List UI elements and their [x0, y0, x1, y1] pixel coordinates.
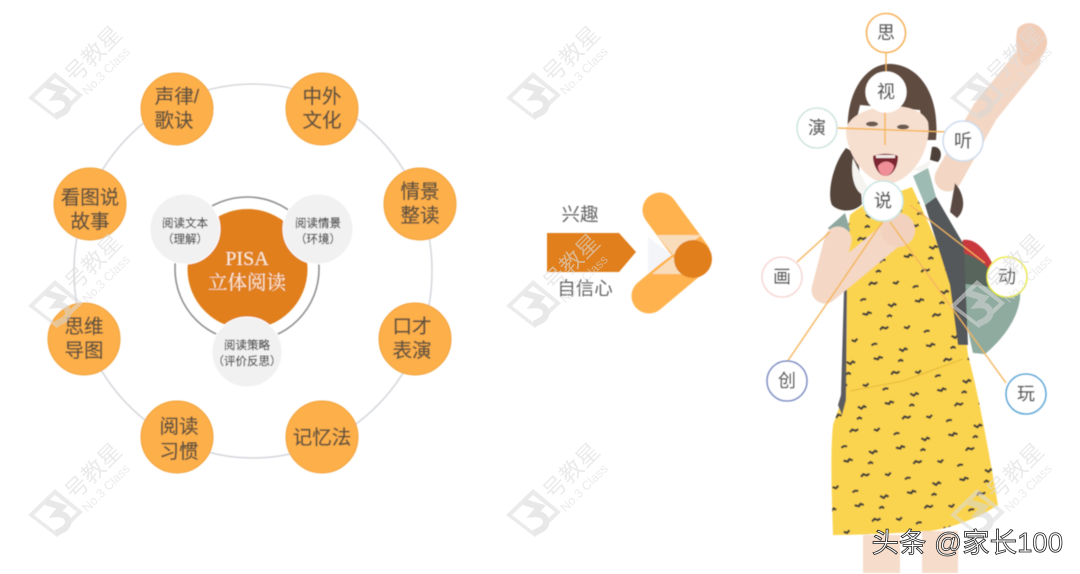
- bubble: 玩: [1006, 374, 1046, 414]
- node: 思维导图: 导图: [64, 340, 104, 362]
- watermark: bottom left: No.3 Class: [80, 462, 133, 515]
- watermark: middle right: No.3 Class: [1002, 253, 1055, 306]
- node: 阅读习惯: 阅读: [159, 416, 199, 438]
- bubble: 思: [866, 14, 906, 52]
- watermark: middle left: 号教星: [60, 229, 127, 296]
- watermark: middle right: 号教星: [982, 229, 1049, 296]
- bubble: 视: [866, 72, 906, 112]
- node: 阅读习惯: [141, 401, 213, 473]
- node: 看图说故事: 故事: [70, 211, 110, 233]
- collar and neck: [852, 158, 932, 198]
- bubble: 听: 听: [954, 131, 972, 151]
- bubble: 说: [863, 181, 903, 221]
- inner node: reading text: 阅读文本: [162, 216, 208, 230]
- centre circle: PISA: PISA: [225, 248, 269, 270]
- node: 口才表演: 表演: [392, 340, 432, 362]
- node: 声律/歌诀: 声律/: [155, 86, 200, 108]
- arrow: pentagon: [547, 233, 636, 272]
- node: 看图说故事: [54, 168, 126, 240]
- watermark: bottom middle: No.3 Class: [558, 462, 611, 515]
- bubble: 画: [762, 257, 802, 297]
- node: 中外文化: [286, 73, 358, 145]
- watermark: middle left: [28, 229, 133, 328]
- node: 记忆法: 记忆法: [293, 427, 351, 449]
- watermark: top left: [28, 21, 133, 120]
- face: [846, 106, 929, 184]
- inner node: reading strategy: （评价反思）: [212, 355, 282, 368]
- node: 中外文化: 文化: [302, 110, 342, 132]
- watermark: top right: [950, 21, 1055, 120]
- bubble: 视: 视: [877, 82, 895, 102]
- label: confidence: 自信心: [557, 278, 613, 299]
- eyes and mouth: [866, 122, 909, 176]
- raised arm: [948, 23, 1047, 178]
- watermark: top left: No.3 Class: [80, 45, 133, 98]
- node: 看图说故事: 看图说: [61, 187, 119, 209]
- watermark: bottom middle: [506, 438, 611, 537]
- watermark: centre: 号教星: [538, 229, 605, 296]
- bubble: 创: [767, 361, 807, 401]
- watermark: top right: No.3 Class: [1002, 45, 1055, 98]
- watermark: centre: [506, 229, 611, 328]
- bubble: 思: 思: [877, 23, 895, 43]
- icon: chevron: [648, 210, 712, 296]
- node: 思维导图: [48, 303, 120, 375]
- inner node: reading strategy: 阅读策略: [224, 338, 270, 352]
- bubble: 创: 创: [778, 371, 796, 391]
- inner node: reading context: （环境）: [295, 232, 341, 246]
- centre circle: PISA: [188, 209, 308, 329]
- inner node: reading text: [150, 194, 220, 264]
- inner node: reading context: [283, 194, 353, 264]
- watermark: bottom right: 号教星: [982, 438, 1049, 505]
- watermark: centre: No.3 Class: [558, 253, 611, 306]
- attribution: 头条 @家长100: 头条 @家长100: [872, 527, 1063, 558]
- pigtails: [830, 147, 963, 218]
- bubble: 动: [987, 257, 1027, 297]
- watermark: bottom right: [950, 438, 1055, 537]
- inner node: reading strategy: [212, 317, 282, 387]
- node: 情景整读: 整读: [400, 205, 440, 227]
- node: 情景整读: [384, 168, 456, 240]
- bubble: 动: 动: [998, 267, 1016, 287]
- node: 中外文化: 中外: [302, 86, 342, 108]
- dress: [831, 187, 998, 535]
- node: 思维导图: 思维: [64, 316, 104, 338]
- watermark: top middle: [506, 21, 611, 120]
- node: 阅读习惯: 习惯: [159, 441, 199, 463]
- watermark: top middle: No.3 Class: [558, 45, 611, 98]
- legs: [863, 531, 958, 573]
- node: 声律/歌诀: [141, 73, 213, 145]
- watermark: middle right: [950, 229, 1055, 328]
- bubble: 听: [943, 121, 983, 161]
- panel: interest and confidence arrow: [547, 204, 712, 299]
- outer ring: [74, 84, 432, 458]
- watermark: top right: 号教星: [982, 21, 1049, 88]
- panel: PISA reading diagram: [48, 73, 456, 473]
- bubble: 玩: 玩: [1017, 384, 1035, 404]
- illustration: girl: [825, 23, 1047, 573]
- inner node: reading text: （理解）: [162, 232, 208, 246]
- node: 记忆法: [286, 401, 358, 473]
- backpack: [950, 240, 1020, 354]
- watermark: bottom left: 号教星: [60, 438, 127, 505]
- watermark: top middle: 号教星: [538, 21, 605, 88]
- bubble: 画: 画: [773, 267, 791, 287]
- hair: [848, 64, 937, 140]
- watermark: bottom left: [28, 438, 133, 537]
- bubble: 说: 说: [874, 191, 892, 211]
- watermark: bottom right: No.3 Class: [1002, 462, 1055, 515]
- inner node: reading context: 阅读情景: [295, 216, 341, 230]
- watermark: bottom middle: 号教星: [538, 438, 605, 505]
- straps: [828, 168, 968, 415]
- node: 情景整读: 情景: [400, 181, 440, 203]
- watermark: top left: 号教星: [60, 21, 127, 88]
- watermark: middle left: No.3 Class: [80, 253, 133, 306]
- label: interest: 兴趣: [561, 204, 599, 225]
- inner ring: [175, 197, 319, 341]
- connector lines: [787, 52, 1006, 383]
- left arm and hand: [825, 213, 915, 290]
- node: 口才表演: 口才: [392, 316, 432, 338]
- bubble: 演: [797, 108, 837, 148]
- node: 口才表演: [379, 303, 451, 375]
- node: 声律/歌诀: 歌诀: [154, 110, 194, 132]
- centre circle: PISA: 立体阅读: [208, 272, 286, 294]
- bubble: 演: 演: [808, 118, 826, 138]
